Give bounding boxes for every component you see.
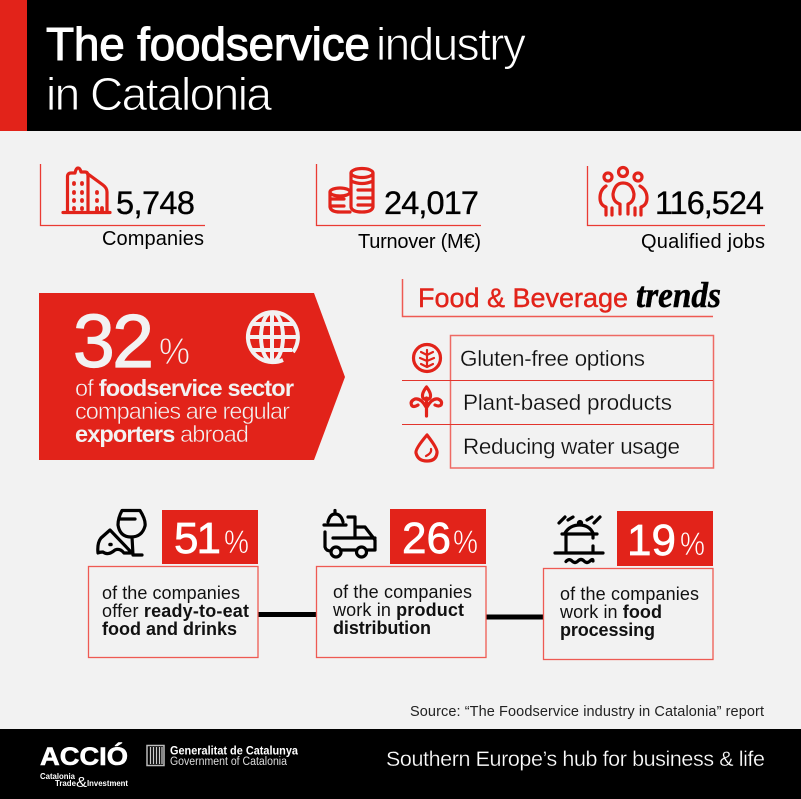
header banner	[0, 0, 801, 131]
icon: globe	[247, 312, 298, 362]
percent badge: 26	[402, 514, 451, 563]
big number: 32	[73, 299, 154, 383]
description box: work in product	[332, 600, 464, 620]
description: companies are regular	[75, 398, 290, 424]
description: exporters abroad	[75, 421, 249, 447]
description box: food and drinks	[102, 619, 237, 639]
description box: offer ready-to-eat	[102, 601, 249, 621]
logo: Generalitat text: Generalitat de Catalunya	[170, 746, 299, 758]
percent badge: 19	[627, 516, 676, 565]
logo: ACCIO: Investment	[87, 778, 128, 788]
footer	[0, 729, 801, 799]
heading: Food & Beverage	[418, 283, 628, 313]
source note: Source: “The Foodservice industry in Catalonia” report	[410, 704, 764, 720]
row text: Plant-based products	[463, 390, 672, 415]
icon: delivery truck	[324, 510, 375, 557]
value: 5,748	[116, 185, 195, 221]
description	[75, 375, 294, 447]
label: Qualified jobs	[641, 231, 765, 253]
connector lines	[258, 612, 544, 620]
logo: ACCIO	[40, 741, 128, 791]
icon: water drop	[416, 435, 437, 461]
icon: coins	[330, 168, 373, 212]
label: Companies	[102, 228, 204, 250]
description box: processing	[560, 620, 655, 640]
description box: of the companies	[102, 583, 240, 603]
stat: companies	[40, 164, 205, 250]
title	[46, 18, 526, 120]
description box: of the companies	[333, 582, 472, 602]
percent badge: %	[680, 526, 705, 562]
label: Turnover (M€)	[358, 231, 481, 253]
title: industry	[376, 18, 526, 70]
icon: people	[600, 168, 647, 215]
logo: ACCIO: Catalonia	[40, 771, 75, 781]
icon: building	[63, 168, 110, 212]
value: 24,017	[384, 185, 479, 221]
percent badge: %	[453, 524, 478, 560]
percent badge	[162, 510, 258, 564]
icon: gluten free	[414, 344, 440, 372]
description box	[544, 568, 713, 660]
logo: ACCIO: &	[76, 774, 87, 791]
logo: Generalitat text: Government of Catalonia	[170, 756, 288, 768]
icon: wine and cheese	[98, 510, 145, 555]
title: The foodservice	[46, 18, 370, 70]
percent badge: %	[224, 524, 249, 560]
description box	[316, 566, 486, 658]
description box: work in food	[559, 602, 662, 622]
percent badge	[390, 509, 486, 564]
percent badge: 51	[174, 514, 221, 563]
panel: exporters arrow	[39, 293, 345, 460]
icon: cooking pot	[555, 517, 603, 562]
card: 26 percent	[316, 509, 486, 658]
value: 116,524	[655, 185, 764, 221]
logo: ACCIO: ACCIÓ	[40, 741, 128, 771]
description box: of the companies	[560, 584, 699, 604]
percent sign: %	[159, 331, 190, 372]
tagline: Southern Europe’s hub for business & life	[386, 747, 765, 771]
card: 51 percent	[88, 510, 258, 658]
title: in Catalonia	[46, 68, 272, 120]
description box: distribution	[333, 618, 431, 638]
description box	[88, 566, 258, 658]
row text: Reducing water usage	[463, 434, 680, 459]
logo: Generalitat text	[170, 746, 299, 768]
trends table	[402, 336, 714, 468]
stat: turnover	[316, 164, 481, 253]
icon: plant	[411, 387, 442, 416]
panel: food and beverage trends	[402, 275, 721, 468]
script word: trends	[636, 275, 721, 315]
logo: Generalitat shield	[147, 746, 164, 766]
percent badge	[617, 511, 713, 566]
stat: qualified jobs	[588, 166, 765, 253]
logo: ACCIO: Trade	[55, 778, 76, 788]
card: 19 percent	[544, 511, 713, 660]
row text: Gluten-free options	[460, 346, 645, 371]
description: of foodservice sector	[75, 375, 294, 401]
